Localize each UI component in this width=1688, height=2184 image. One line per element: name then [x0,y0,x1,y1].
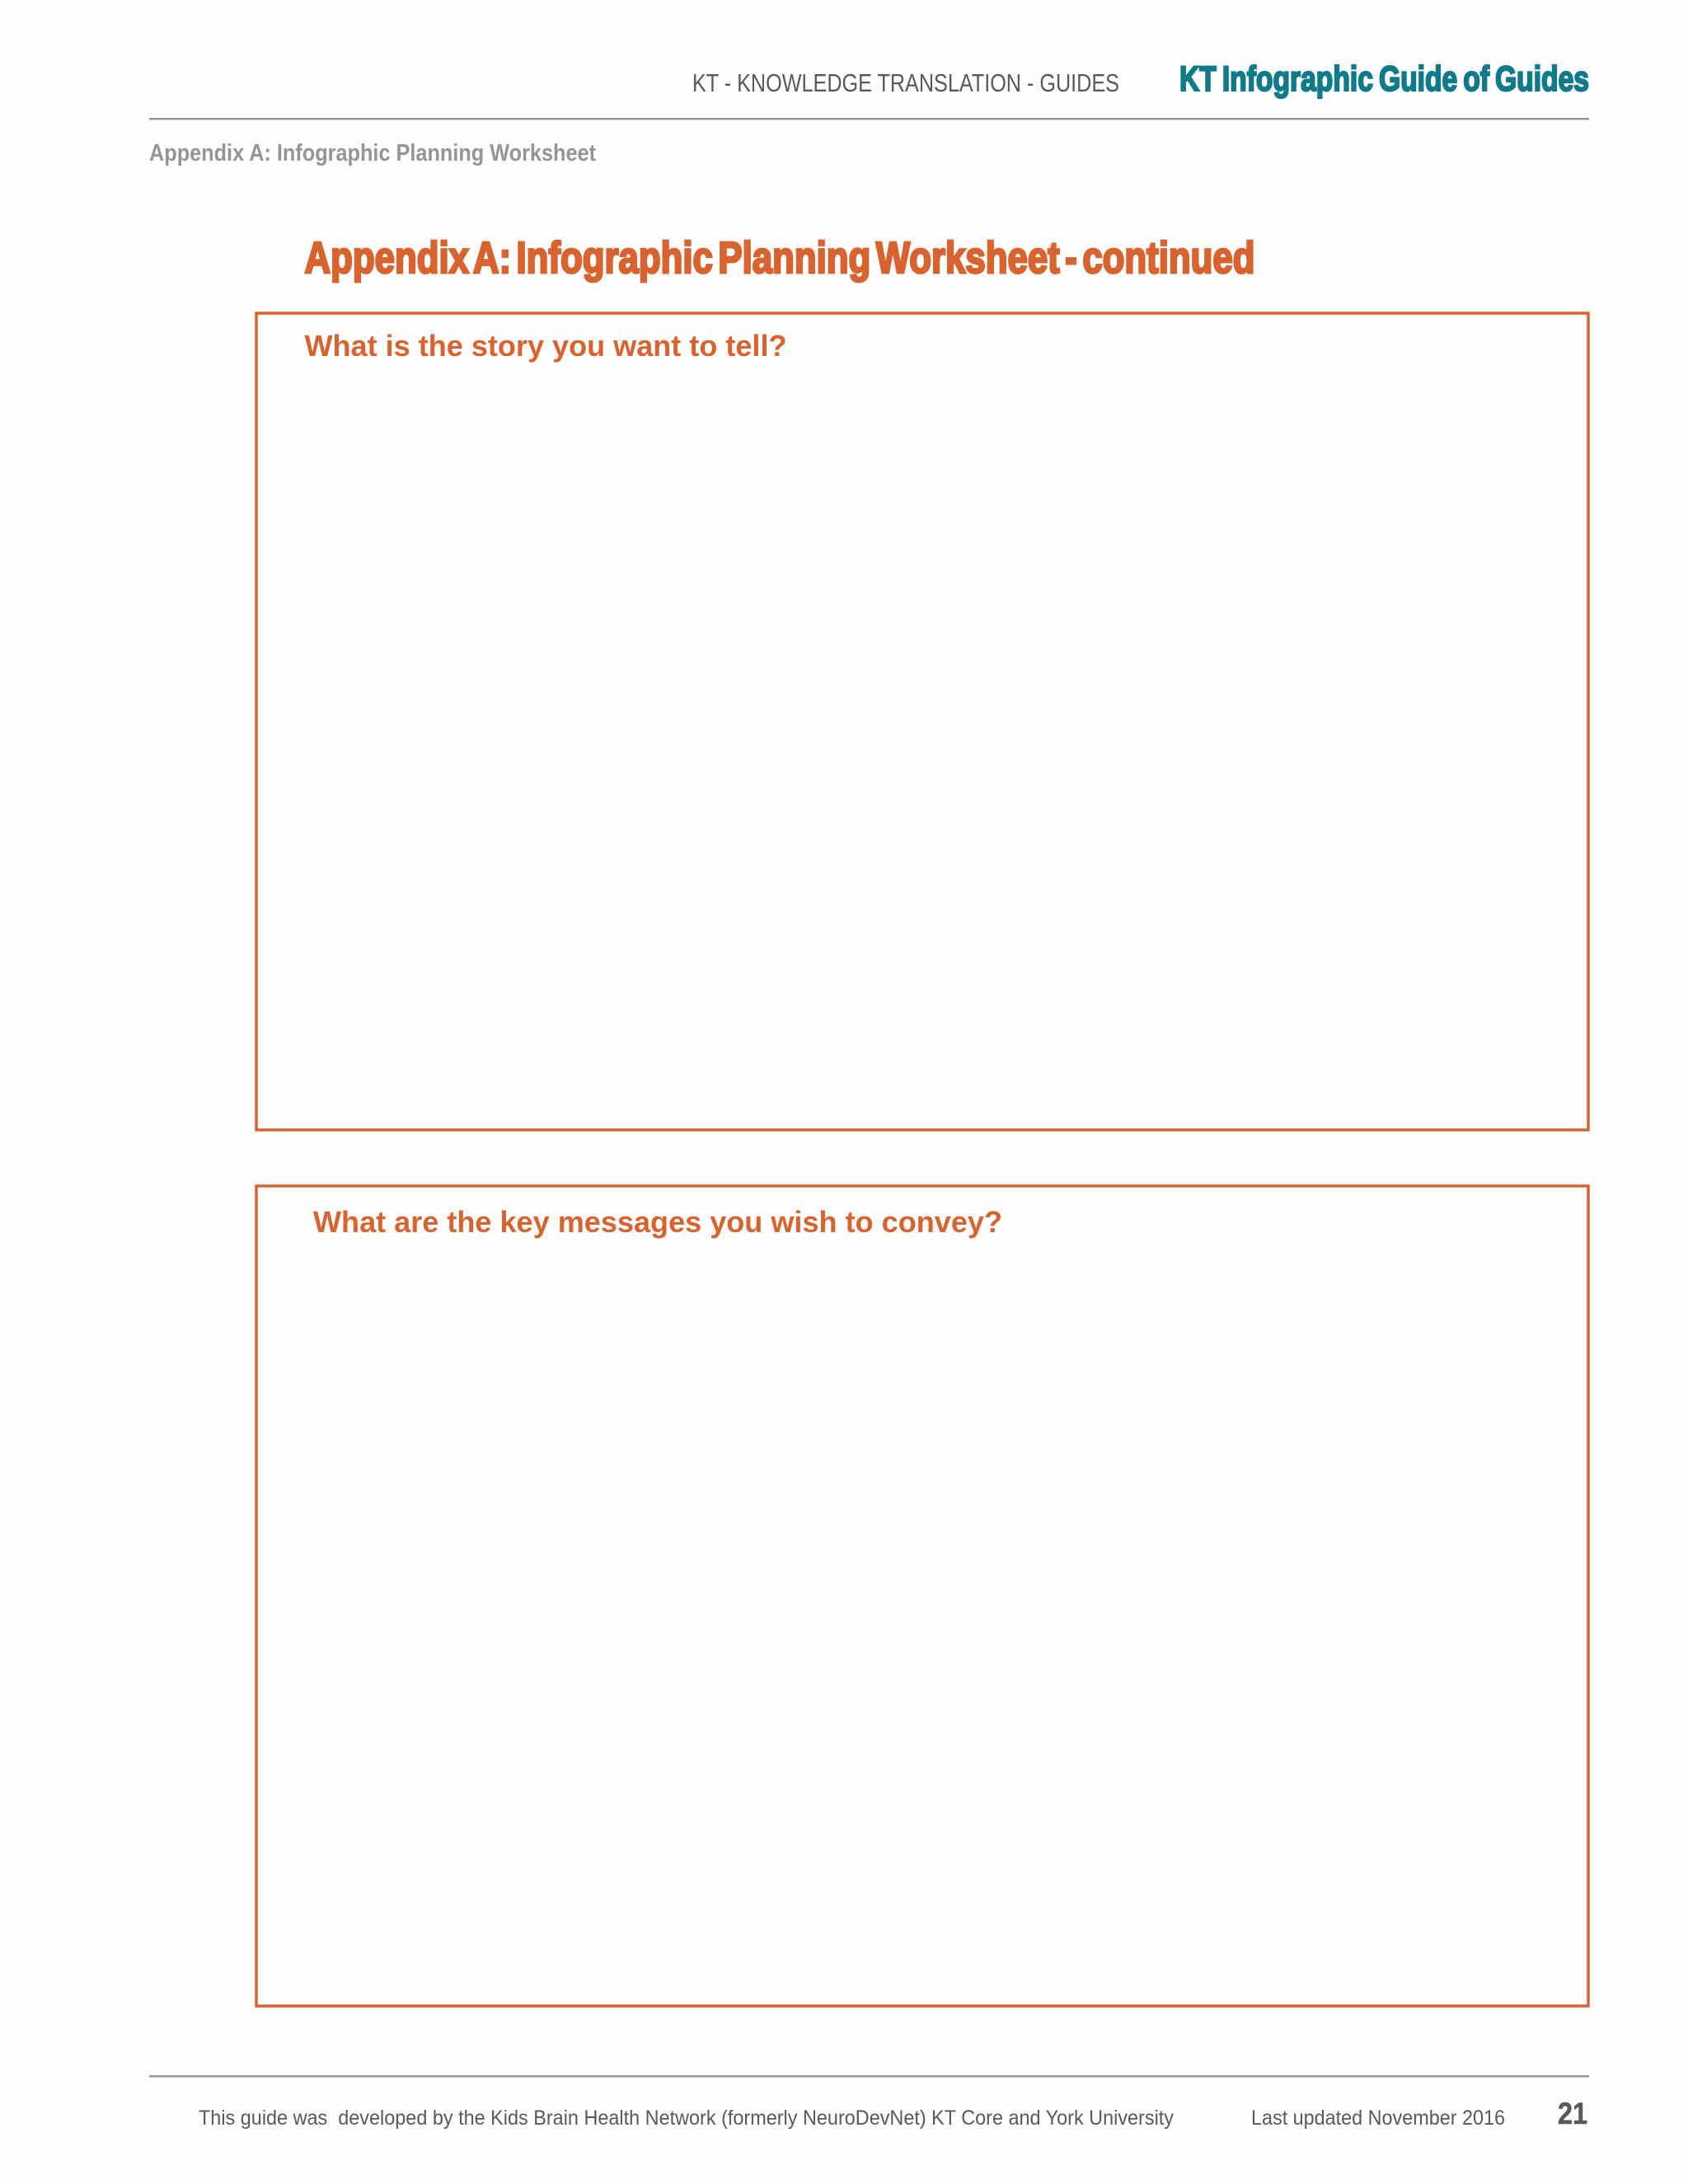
section label: Appendix A: Infographic Planning Worksheet [149,140,596,166]
panel heading: story question: What is the story you want to tell? [305,329,786,363]
panel heading: key messages question: What are the key messages you wish to convey? [313,1205,1002,1239]
footer: last updated: Last updated November 2016 [1251,2107,1505,2130]
panel: story [256,313,1588,1130]
page heading: Appendix A: Infographic Planning Worksheet - continued [305,233,1254,283]
footer: page number: 21 [1558,2097,1587,2130]
header: guide series label: KT - KNOWLEDGE TRANSLATION - GUIDES [692,68,1119,97]
header: guide title: KT Infographic Guide of Guides [1179,59,1589,99]
panel: key messages [256,1186,1588,2006]
footer: credit: This guide was developed by the Kids Brain Health Network (formerly NeuroDevNet) KT Core and York University [199,2107,1174,2130]
